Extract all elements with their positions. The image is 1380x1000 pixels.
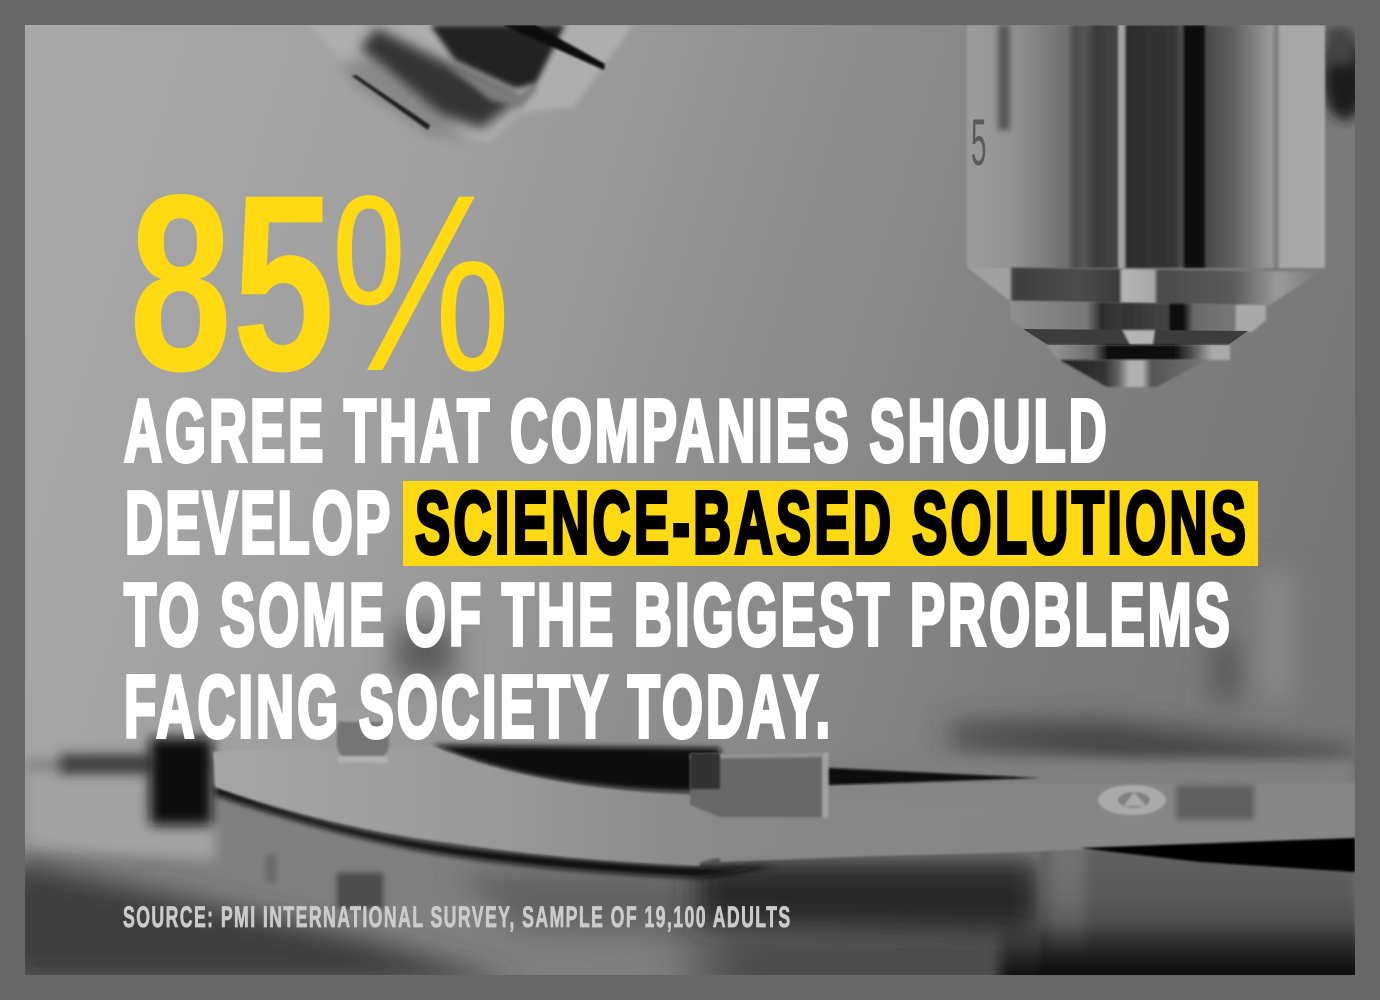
arm xyxy=(213,746,1085,866)
sample on slide xyxy=(1098,785,1166,815)
out-of-focus shapes behind text xyxy=(395,570,1355,768)
highlight: science-based solutions: SCIENCE-BASED SOLUTIONS xyxy=(415,474,1246,572)
stat: 85% xyxy=(129,141,511,424)
engraved digit: 5 xyxy=(971,105,986,179)
pin xyxy=(336,720,390,757)
headline text xyxy=(124,382,1230,756)
dark blur at top-right edge xyxy=(1324,38,1355,128)
icon: microscope stage xyxy=(25,720,1355,975)
lower dark base, left xyxy=(5,858,520,985)
line 3: TO SOME OF THE BIGGEST PROBLEMS xyxy=(124,566,1230,664)
percent sign: % xyxy=(330,141,511,424)
block xyxy=(690,753,829,817)
dark block behind arm xyxy=(150,738,212,825)
line 2 start: DEVELOP xyxy=(125,474,390,572)
dark shadow left of arm xyxy=(60,755,150,773)
lower right plate xyxy=(1040,849,1355,964)
slide xyxy=(720,783,1355,862)
black under arm xyxy=(215,785,780,878)
wedges xyxy=(829,768,1040,785)
icon: upper-left objective lens xyxy=(310,25,633,142)
line 4: FACING SOCIETY TODAY. xyxy=(124,658,830,756)
icon: upper-right objective lens xyxy=(967,25,1325,387)
dark reflection band xyxy=(695,860,1040,932)
bottom darkening xyxy=(671,899,1355,975)
source note: SOURCE: PMI INTERNATIONAL SURVEY, SAMPLE OF 19,100 ADULTS xyxy=(123,902,790,934)
digits: 85 xyxy=(129,142,335,424)
lower base xyxy=(25,760,1355,990)
black recess xyxy=(432,745,720,792)
pin reflection xyxy=(337,873,383,909)
dark patch on slide xyxy=(1176,785,1254,820)
mid shadow xyxy=(454,872,700,935)
line 1: AGREE THAT COMPANIES SHOULD xyxy=(124,382,1107,480)
